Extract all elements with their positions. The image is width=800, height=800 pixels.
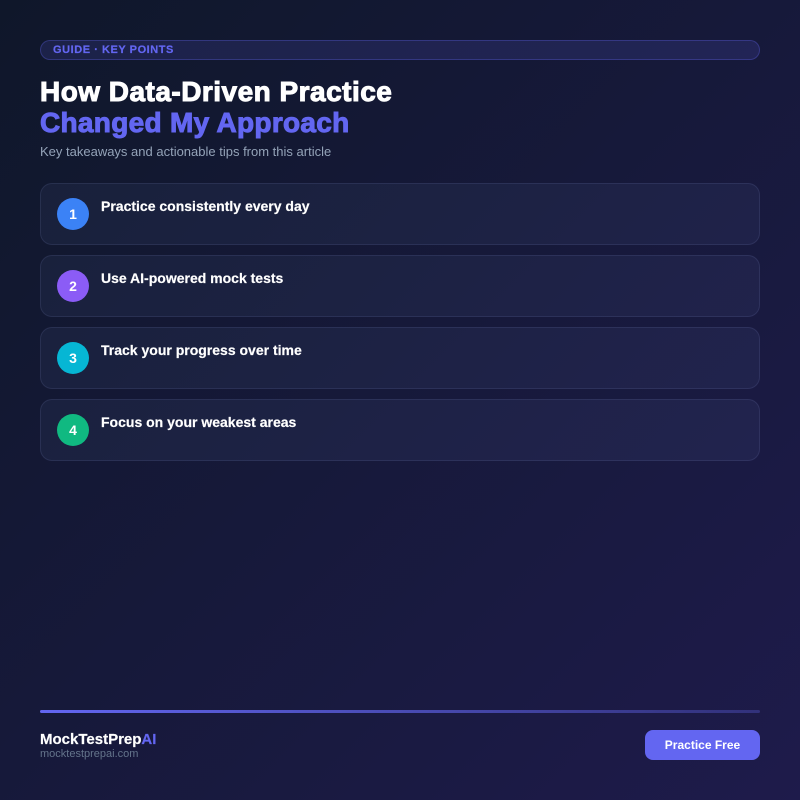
panel: tip 2 <box>40 255 760 317</box>
tip 4 text: Focus on your weakest areas <box>101 414 296 430</box>
brand url: mocktestprepai.com <box>40 748 138 760</box>
panel: tip 4 <box>40 399 760 461</box>
tip 2 text: Use AI-powered mock tests <box>101 270 283 286</box>
footer accent bar <box>40 710 760 713</box>
call to action button: Practice Free <box>665 738 740 752</box>
tip 3 text: Track your progress over time <box>101 342 302 358</box>
icon: number 1 <box>57 198 89 230</box>
tip 1 text: Practice consistently every day <box>101 198 310 214</box>
icon: number 3 <box>57 342 89 374</box>
panel: tip 3 <box>40 327 760 389</box>
badge: guide key points <box>40 40 760 60</box>
subtitle: Key takeaways and actionable tips from this article <box>40 144 331 159</box>
footer brand <box>40 731 156 760</box>
badge: guide key points: GUIDE · KEY POINTS <box>53 44 174 56</box>
title <box>40 76 392 138</box>
call to action button <box>645 730 760 760</box>
icon: number 3: 3 <box>69 350 77 366</box>
title: Changed My Approach <box>40 107 350 138</box>
icon: number 2: 2 <box>69 278 77 294</box>
icon: number 4: 4 <box>69 422 77 438</box>
brand name: MockTestPrepAI <box>40 731 156 748</box>
panel: tip 1 <box>40 183 760 245</box>
icon: number 2 <box>57 270 89 302</box>
icon: number 4 <box>57 414 89 446</box>
title: How Data-Driven Practice <box>40 76 392 107</box>
icon: number 1: 1 <box>69 206 77 222</box>
